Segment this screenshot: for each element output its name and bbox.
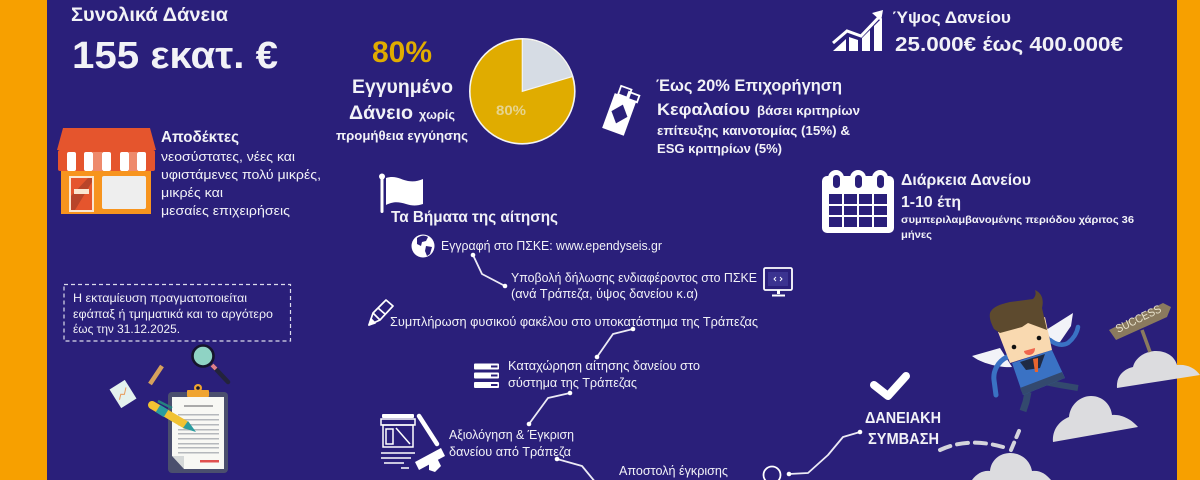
connector 5 to 6	[555, 457, 596, 480]
panel: loan duration	[822, 170, 1134, 241]
step 5: assessment and approval: δανείου από Τράπεζα	[449, 444, 571, 459]
step 4: bank system entry: σύστημα της Τράπεζας	[508, 375, 637, 390]
contract label	[865, 410, 941, 448]
recipients heading: Αποδέκτες	[161, 129, 239, 146]
illustration: success journey	[940, 290, 1200, 480]
pie chart: 80%	[496, 102, 527, 118]
icon: bank and stamp	[381, 414, 445, 472]
icon: globe	[412, 234, 434, 258]
connector 1 to 2	[471, 253, 507, 288]
icon: small document	[110, 380, 136, 408]
connector 4 to 5	[527, 391, 572, 426]
step 2: declaration of interest: Υποβολή δήλωσης ενδιαφέροντος στο ΠΣΚΕ	[511, 270, 757, 285]
grant criteria: επίτευξης καινοτομίας (15%) &	[657, 124, 850, 138]
grant criteria: βάσει κριτηρίων	[757, 104, 860, 118]
cloud: top	[1117, 351, 1200, 388]
guarantee qualifier: χωρίς	[419, 107, 455, 122]
panel: total loans	[71, 5, 278, 77]
duration label: Διάρκεια Δανείου	[901, 172, 1031, 189]
step 4: bank system entry	[508, 358, 700, 390]
recipients description: μεσαίες επιχειρήσεις	[161, 203, 290, 218]
step 5: assessment and approval	[449, 427, 574, 459]
step 4: bank system entry: Καταχώρηση αίτησης δανείου στο	[508, 358, 700, 373]
panel: grant	[602, 76, 860, 156]
signpost: success: SUCCESS	[1114, 303, 1164, 336]
icon: server stack	[474, 364, 499, 388]
grant heading: Έως 20% Επιχορήγηση	[656, 76, 842, 95]
callout: disbursement note	[64, 284, 290, 341]
callout: disbursement note: εφάπαξ ή τμηματικά και το αργότερο	[73, 307, 273, 321]
icon: pencil outline	[369, 300, 393, 325]
right orange band	[1177, 0, 1200, 480]
icon: banknote tickets	[602, 85, 640, 136]
recipients description: μικρές και	[161, 185, 223, 200]
signpost: success	[1109, 303, 1171, 352]
icon: check mark	[874, 376, 906, 396]
panel: recipients	[57, 128, 321, 218]
panel: guaranteed loan	[336, 36, 575, 144]
guarantee fee note: προμήθεια εγγύησης	[336, 128, 468, 143]
step 5: assessment and approval: Αξιολόγηση & Έγκριση	[449, 427, 574, 442]
guarantee title: Εγγυημένο	[352, 77, 453, 98]
guarantee percentage: 80%	[372, 36, 432, 69]
icon: shop	[57, 128, 156, 214]
amount value: 25.000€ έως 400.000€	[895, 33, 1124, 56]
icon: monitor	[764, 268, 792, 296]
pie chart	[470, 39, 575, 144]
step 6: sending approval: Αποστολή έγκρισης	[619, 463, 728, 478]
icon: calendar	[822, 170, 894, 233]
step 1: registration	[412, 234, 663, 258]
dashed jump path	[940, 431, 1019, 450]
panel: loan contract	[865, 376, 941, 448]
amount label: Ύψος Δανείου	[892, 8, 1011, 27]
step 2: declaration of interest: (ανά Τράπεζα, ύψος δανείου κ.α)	[511, 286, 698, 301]
guarantee title second line: Δάνειο	[349, 103, 413, 124]
icon: pen	[152, 401, 196, 432]
recipients description: υφιστάμενες πολύ μικρές,	[161, 167, 321, 182]
duration note: συμπεριλαμβανομένης περιόδου χάριτος 36	[901, 214, 1134, 226]
icon: flag	[379, 174, 423, 213]
character: flying businessman	[972, 290, 1078, 411]
icon: growth chart	[833, 10, 883, 51]
duration value: 1-10 έτη	[901, 194, 961, 211]
cloud: bottom	[972, 453, 1051, 480]
connector 6 to contract	[787, 430, 862, 476]
duration note: μήνες	[901, 229, 933, 241]
contract label: ΣΥΜΒΑΣΗ	[868, 431, 939, 448]
panel: application steps	[369, 174, 862, 480]
step 2: declaration of interest	[511, 270, 757, 301]
icon: pencil	[150, 366, 162, 384]
step 1: registration: Εγγραφή στο ΠΣΚΕ: www.ependyseis.gr	[441, 238, 663, 253]
icon: clipboard	[168, 384, 228, 473]
icon: magnifier outline	[764, 466, 780, 480]
connector 3 to 4	[595, 327, 635, 359]
contract label: ΔΑΝΕΙΑΚΗ	[865, 410, 941, 427]
step 3: physical file: Συμπλήρωση φυσικού φακέλου στο υποκατάστημα της Τράπεζας	[390, 314, 758, 329]
total loans value: 155 εκατ. €	[72, 35, 278, 77]
grant criteria	[657, 104, 860, 156]
callout: disbursement note: Η εκταμίευση πραγματοποιείται	[73, 291, 247, 305]
steps heading: Τα Βήματα της αίτησης	[391, 209, 558, 226]
duration note	[901, 214, 1134, 241]
panel: loan amount	[833, 8, 1124, 56]
grant heading second line: Κεφαλαίου	[657, 100, 750, 119]
icon: magnifier	[192, 346, 228, 382]
total loans label: Συνολικά Δάνεια	[71, 5, 228, 26]
cloud: middle	[1053, 396, 1138, 442]
left orange band	[0, 0, 47, 480]
callout: disbursement note: έως την 31.12.2025.	[73, 322, 180, 336]
recipients description	[161, 149, 321, 218]
illustration: clipboard and tools	[110, 346, 228, 473]
recipients description: νεοσύστατες, νέες και	[161, 149, 295, 164]
grant criteria: ESG κριτηρίων (5%)	[657, 142, 782, 156]
